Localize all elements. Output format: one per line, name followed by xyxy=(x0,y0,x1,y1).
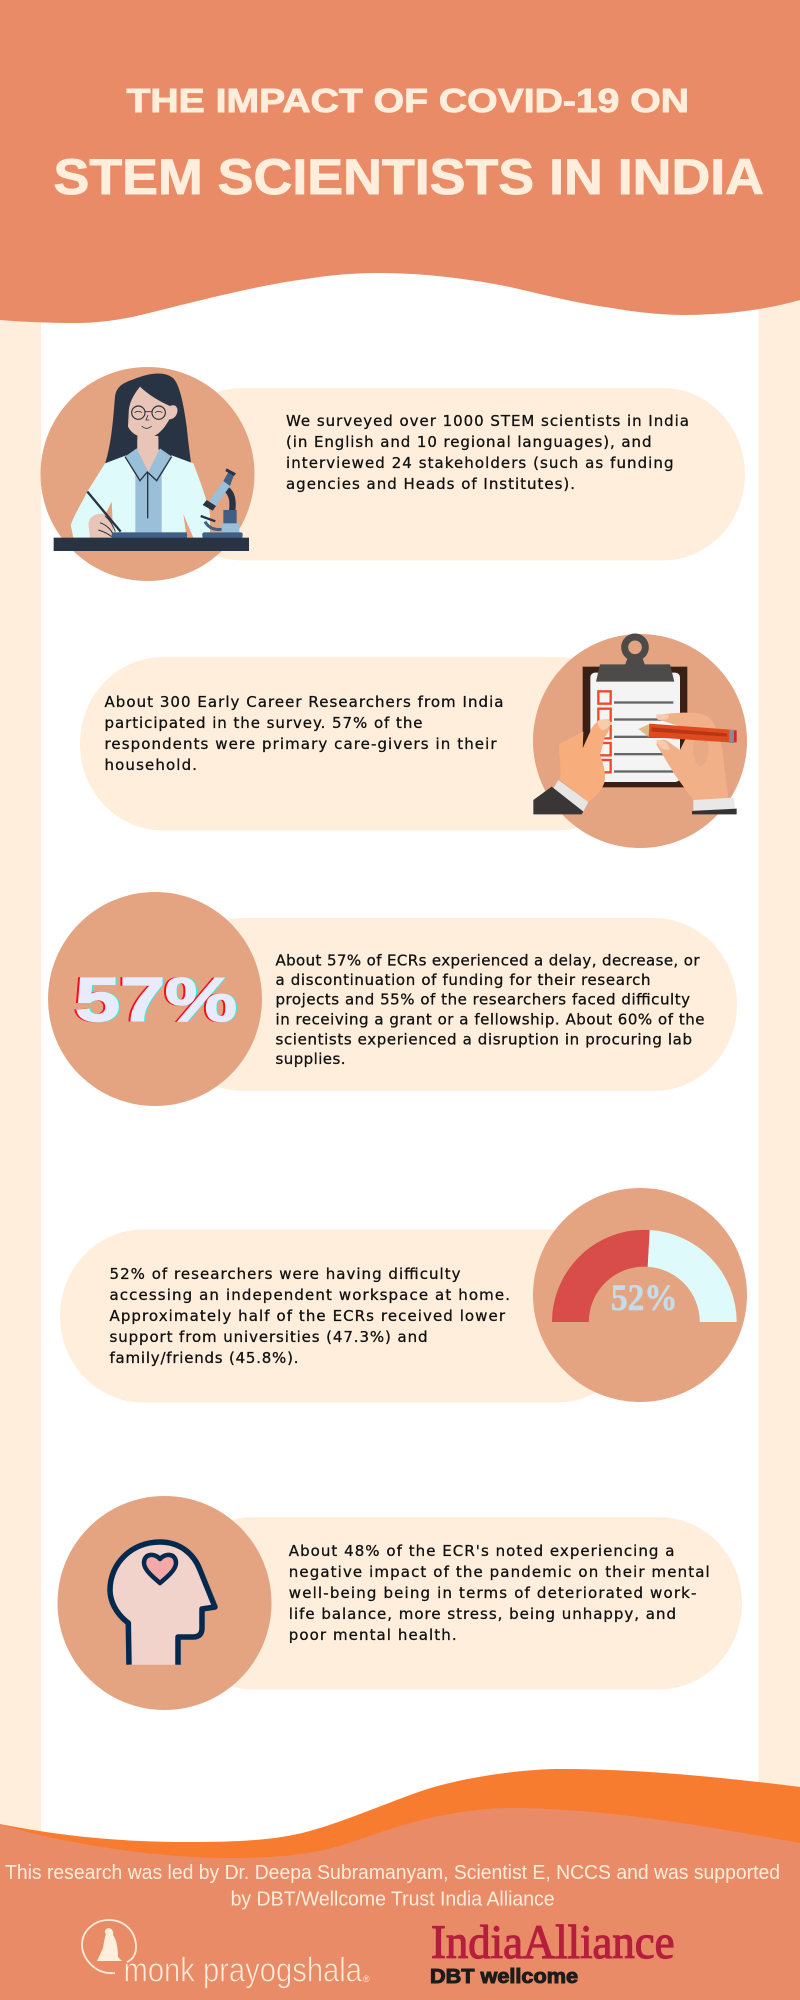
mental health text: life balance, more stress, being unhappy, and xyxy=(289,1605,676,1623)
panel: participants xyxy=(80,634,747,848)
mental health text: well-being being in terms of deteriorated work- xyxy=(289,1584,696,1602)
logo: India Alliance xyxy=(430,1916,674,1988)
icon circle xyxy=(533,634,747,848)
title line 2: STEM SCIENTISTS IN INDIA xyxy=(54,149,764,205)
funding text: in receiving a grant or a fellowship. About 60% of the xyxy=(276,1010,704,1028)
survey text: agencies and Heads of Institutes). xyxy=(286,475,575,493)
participants text: About 300 Early Career Researchers from India xyxy=(104,693,504,711)
logo: monk prayogshala: monk prayogshala xyxy=(124,1952,362,1990)
title line 1: THE IMPACT OF COVID-19 ON xyxy=(126,82,689,119)
survey text: interviewed 24 stakeholders (such as funding xyxy=(286,454,674,472)
icon: head with heart xyxy=(110,1542,215,1665)
pill background xyxy=(80,657,640,830)
mental health text xyxy=(289,1542,710,1644)
icon: scientist with microscope xyxy=(54,374,249,551)
mental health text: poor mental health. xyxy=(289,1626,457,1644)
funding text: projects and 55% of the researchers faced difficulty xyxy=(276,990,690,1008)
funding text xyxy=(276,952,704,1068)
funding text: a discontinuation of funding for their research xyxy=(276,971,650,989)
footer xyxy=(0,1769,800,2000)
participants text xyxy=(104,693,504,774)
panel: workspace and support xyxy=(60,1188,747,1402)
icon circle xyxy=(533,1188,747,1402)
logo: India Alliance: IndiaAlliance xyxy=(431,1916,674,1969)
pill background xyxy=(170,1517,742,1690)
workspace text: Approximately half of the ECRs received lower xyxy=(110,1307,506,1325)
header banner xyxy=(0,0,800,323)
pill background xyxy=(160,918,737,1091)
survey text xyxy=(286,412,689,493)
logo: monk prayogshala: ® xyxy=(363,1974,370,1984)
workspace text xyxy=(110,1265,510,1367)
mental health text: About 48% of the ECR's noted experiencing a xyxy=(289,1542,674,1560)
footer background wave xyxy=(0,1808,800,2000)
orange footer wave xyxy=(0,1769,800,1900)
icon circle xyxy=(58,1496,272,1710)
funding text: About 57% of ECRs experienced a delay, decrease, or xyxy=(276,952,700,970)
header wave shape xyxy=(0,0,800,323)
mental health text: negative impact of the pandemic on their mental xyxy=(289,1563,710,1581)
credit text xyxy=(5,1862,780,1911)
gauge chart 52%: 52% xyxy=(611,1278,678,1319)
funding text: supplies. xyxy=(276,1050,346,1068)
icon: clipboard with hands and pencil xyxy=(533,637,737,814)
survey text: We surveyed over 1000 STEM scientists in India xyxy=(286,412,689,430)
workspace text: accessing an independent workspace at home. xyxy=(110,1286,510,1304)
workspace text: family/friends (45.8%). xyxy=(110,1349,298,1367)
participants text: respondents were primary care-givers in their xyxy=(104,735,497,753)
participants text: participated in the survey. 57% of the xyxy=(104,714,422,732)
credit text: by DBT/Wellcome Trust India Alliance xyxy=(231,1889,555,1911)
funding text: scientists experienced a disruption in procuring lab xyxy=(276,1030,692,1048)
logo: India Alliance: DBT wellcome xyxy=(430,1966,578,1988)
panel: mental health xyxy=(58,1496,742,1710)
logo: monk prayogshala xyxy=(82,1920,370,1990)
panel: survey overview xyxy=(40,367,745,581)
pill background xyxy=(60,1230,640,1402)
icon circle xyxy=(48,892,262,1106)
gauge chart 52% xyxy=(552,1230,737,1322)
panel: funding impact xyxy=(48,892,737,1106)
stat: 57%: 57% xyxy=(75,966,237,1035)
pill background xyxy=(160,388,745,560)
workspace text: support from universities (47.3%) and xyxy=(110,1328,428,1346)
survey text: (in English and 10 regional languages), and xyxy=(286,433,652,451)
workspace text: 52% of researchers were having difficulty xyxy=(110,1265,461,1283)
icon circle xyxy=(40,367,254,581)
participants text: household. xyxy=(104,756,197,774)
credit text: This research was led by Dr. Deepa Subramanyam, Scientist E, NCCS and was supported xyxy=(5,1862,780,1884)
